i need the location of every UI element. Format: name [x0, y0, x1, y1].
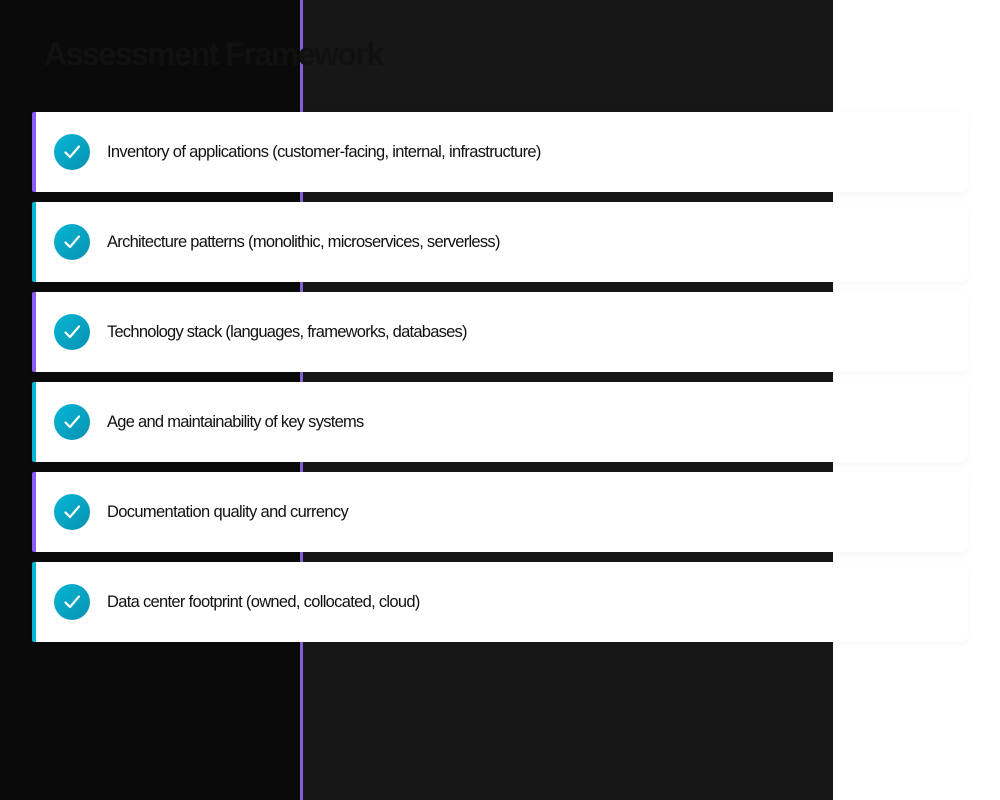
panel: technology stack	[32, 292, 968, 372]
icon: check circle	[54, 314, 90, 350]
background: left dark band	[0, 0, 300, 800]
item text: Age and maintainability of key systems	[107, 413, 364, 431]
item text: Architecture patterns (monolithic, microservices, serverless)	[107, 233, 500, 251]
icon: check circle	[54, 224, 90, 260]
icon: check circle	[54, 494, 90, 530]
icon: check circle	[54, 404, 90, 440]
panel: applications inventory	[32, 112, 968, 192]
icon: check circle	[54, 134, 90, 170]
icon: check circle	[54, 584, 90, 620]
item text: Data center footprint (owned, collocated, cloud)	[107, 593, 420, 611]
item text: Technology stack (languages, frameworks, databases)	[107, 323, 467, 341]
panel: age and maintainability	[32, 382, 968, 462]
panel: data center footprint	[32, 562, 968, 642]
item text: Inventory of applications (customer-facing, internal, infrastructure)	[107, 143, 541, 161]
title: Assessment Framework	[44, 36, 383, 72]
purple vertical line	[300, 0, 303, 800]
background: right dark band	[303, 0, 833, 800]
panel: documentation quality	[32, 472, 968, 552]
item text: Documentation quality and currency	[107, 503, 348, 521]
panel: architecture patterns	[32, 202, 968, 282]
